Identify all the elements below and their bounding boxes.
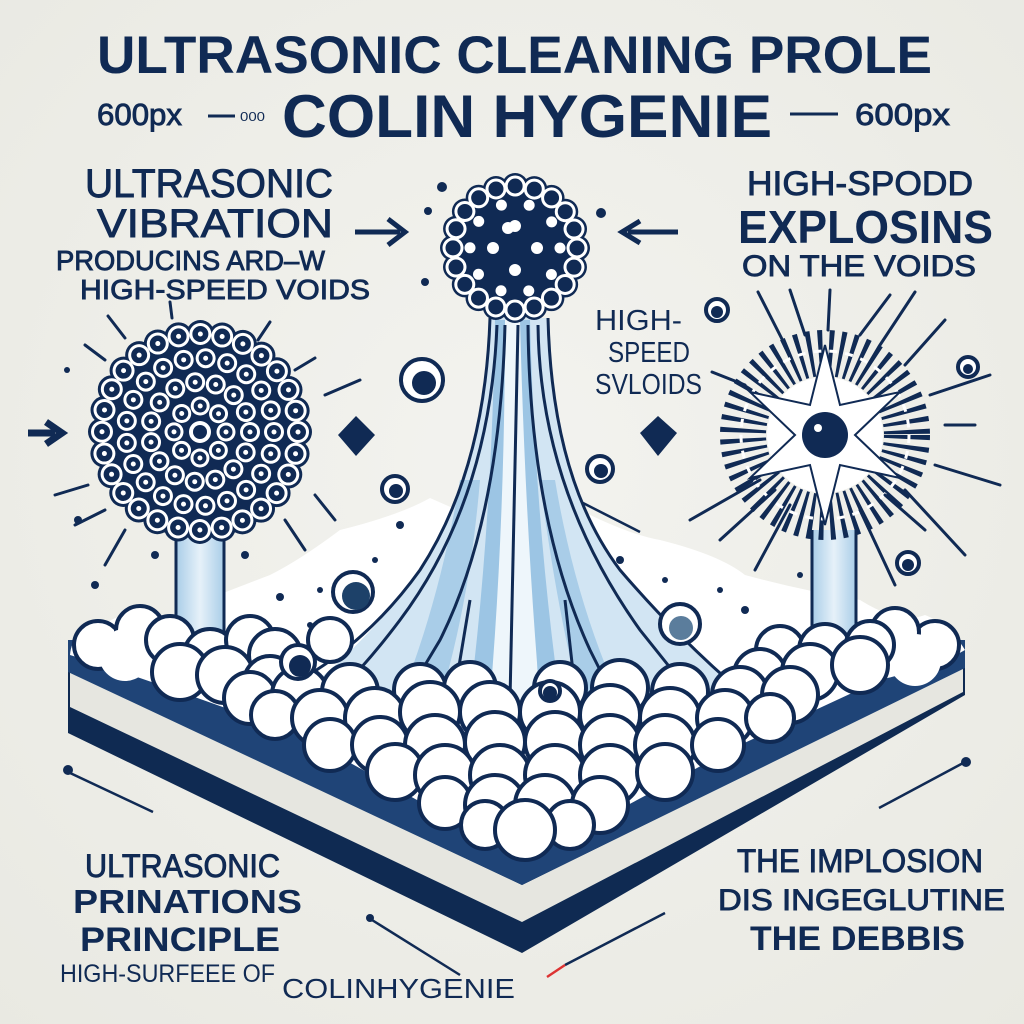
foam clusters <box>74 606 959 860</box>
text block: ultrasonic vibration: PRODUCINS ARD–W <box>56 245 326 276</box>
right size label: 600px <box>855 97 951 132</box>
caption: bottom left: PRINATIONS <box>73 883 302 920</box>
text block: high-speed voids: HIGH- <box>595 305 682 337</box>
pointer: bottom left <box>366 914 460 975</box>
caption: bottom right: DIS INGEGLUTINE <box>718 884 1005 917</box>
caption: bottom right: THE DEBBIS <box>750 920 965 958</box>
text block: ultrasonic vibration: VIBRATION <box>97 202 333 246</box>
text block: ultrasonic vibration <box>56 162 370 305</box>
arrow: left sphere <box>28 422 62 444</box>
left size label <box>97 97 265 132</box>
large bubbles <box>281 299 978 701</box>
text block: high-speed voids: SVLOIDS <box>595 369 702 401</box>
pointer: bottom centre <box>547 913 665 977</box>
pointer: left <box>63 765 153 812</box>
platform slab <box>68 640 965 953</box>
text block: high-speed explosions: ON THE VOIDS <box>742 250 976 283</box>
text block: high-speed explosions <box>738 165 993 283</box>
text block: high-speed explosions: EXPLOSINS <box>738 201 993 253</box>
title line 1: ULTRASONIC CLEANING PROLE <box>97 26 932 85</box>
text block: ultrasonic vibration: ULTRASONIC <box>85 162 333 206</box>
central jet <box>300 318 745 700</box>
caption: bottom left: ULTRASONIC <box>85 848 280 884</box>
text block: high-speed explosions: HIGH-SPODD <box>747 165 973 203</box>
text block: high-speed voids <box>595 305 702 401</box>
arrow: to central sphere right <box>355 219 405 245</box>
foam mass background <box>70 498 965 860</box>
left size label: 000 <box>240 109 265 124</box>
left sphere rays <box>55 302 360 589</box>
caption: bottom right: THE IMPLOSION <box>737 843 983 879</box>
left sphere <box>100 332 300 532</box>
caption: bottom left <box>60 848 515 1004</box>
left sphere column <box>176 515 224 650</box>
caption: bottom right <box>718 843 1005 958</box>
text block: high-speed voids: SPEED <box>608 337 690 369</box>
arrow: to central sphere left <box>622 221 678 243</box>
central sphere bubbles <box>421 182 606 286</box>
title line 2: COLIN HYGENIE <box>282 83 772 150</box>
pointer: right <box>879 757 971 808</box>
right burst column <box>812 530 856 655</box>
caption: bottom left: HIGH-SURFEEE OF <box>60 960 275 988</box>
right burst <box>741 345 909 525</box>
central sphere <box>453 186 577 310</box>
text block: ultrasonic vibration: HIGH-SPEED VOIDS <box>80 274 370 305</box>
caption: bottom left: COLINHYGENIE <box>282 973 515 1004</box>
caption: bottom left: PRINCIPLE <box>80 921 280 959</box>
icon: diamond right <box>640 416 677 456</box>
burst rays <box>690 290 1000 585</box>
foam top edge line <box>583 503 640 532</box>
foam specks <box>276 521 803 628</box>
icon: diamond left <box>338 416 375 456</box>
left size label: 600px <box>97 97 182 132</box>
